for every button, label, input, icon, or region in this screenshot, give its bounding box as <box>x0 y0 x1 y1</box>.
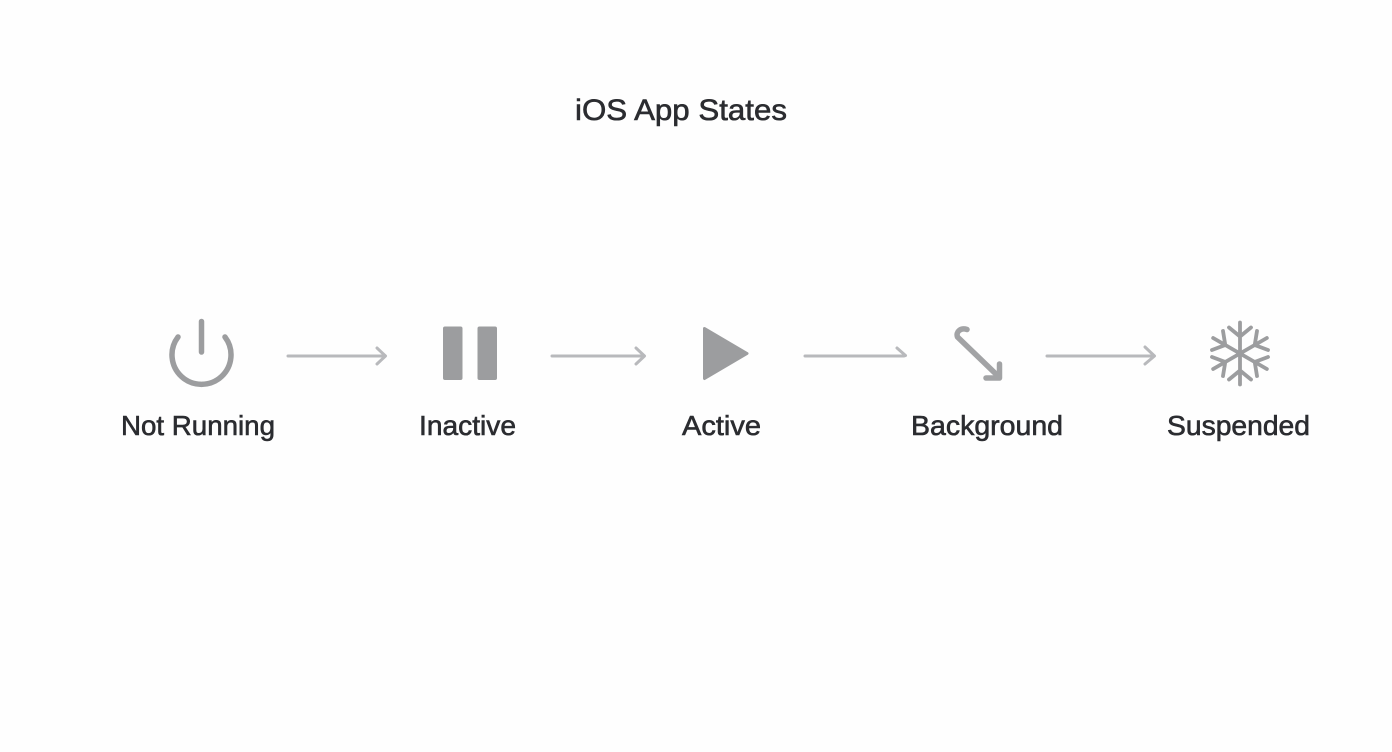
arrow: Active to Background <box>805 348 906 356</box>
arrow: Not Running to Inactive <box>288 348 386 364</box>
state: Active <box>682 328 761 441</box>
state: Background <box>911 329 1063 441</box>
icon: snowflake <box>1208 322 1272 384</box>
state: Suspended <box>1167 322 1310 441</box>
label: Background: Background <box>911 410 1063 441</box>
arrow: Background to Suspended <box>1047 347 1154 364</box>
state: Inactive <box>419 326 516 441</box>
state: Not Running <box>121 322 275 441</box>
icon: play <box>704 328 747 378</box>
label: Inactive: Inactive <box>419 410 516 441</box>
icon: pause <box>443 326 497 380</box>
icon: power <box>172 322 231 384</box>
label: Not Running: Not Running <box>121 410 275 441</box>
icon: background arrow <box>957 329 1000 378</box>
label: Suspended: Suspended <box>1167 410 1310 441</box>
title: iOS App States <box>575 94 787 127</box>
label: Active: Active <box>682 410 761 441</box>
arrow: Inactive to Active <box>552 348 644 364</box>
